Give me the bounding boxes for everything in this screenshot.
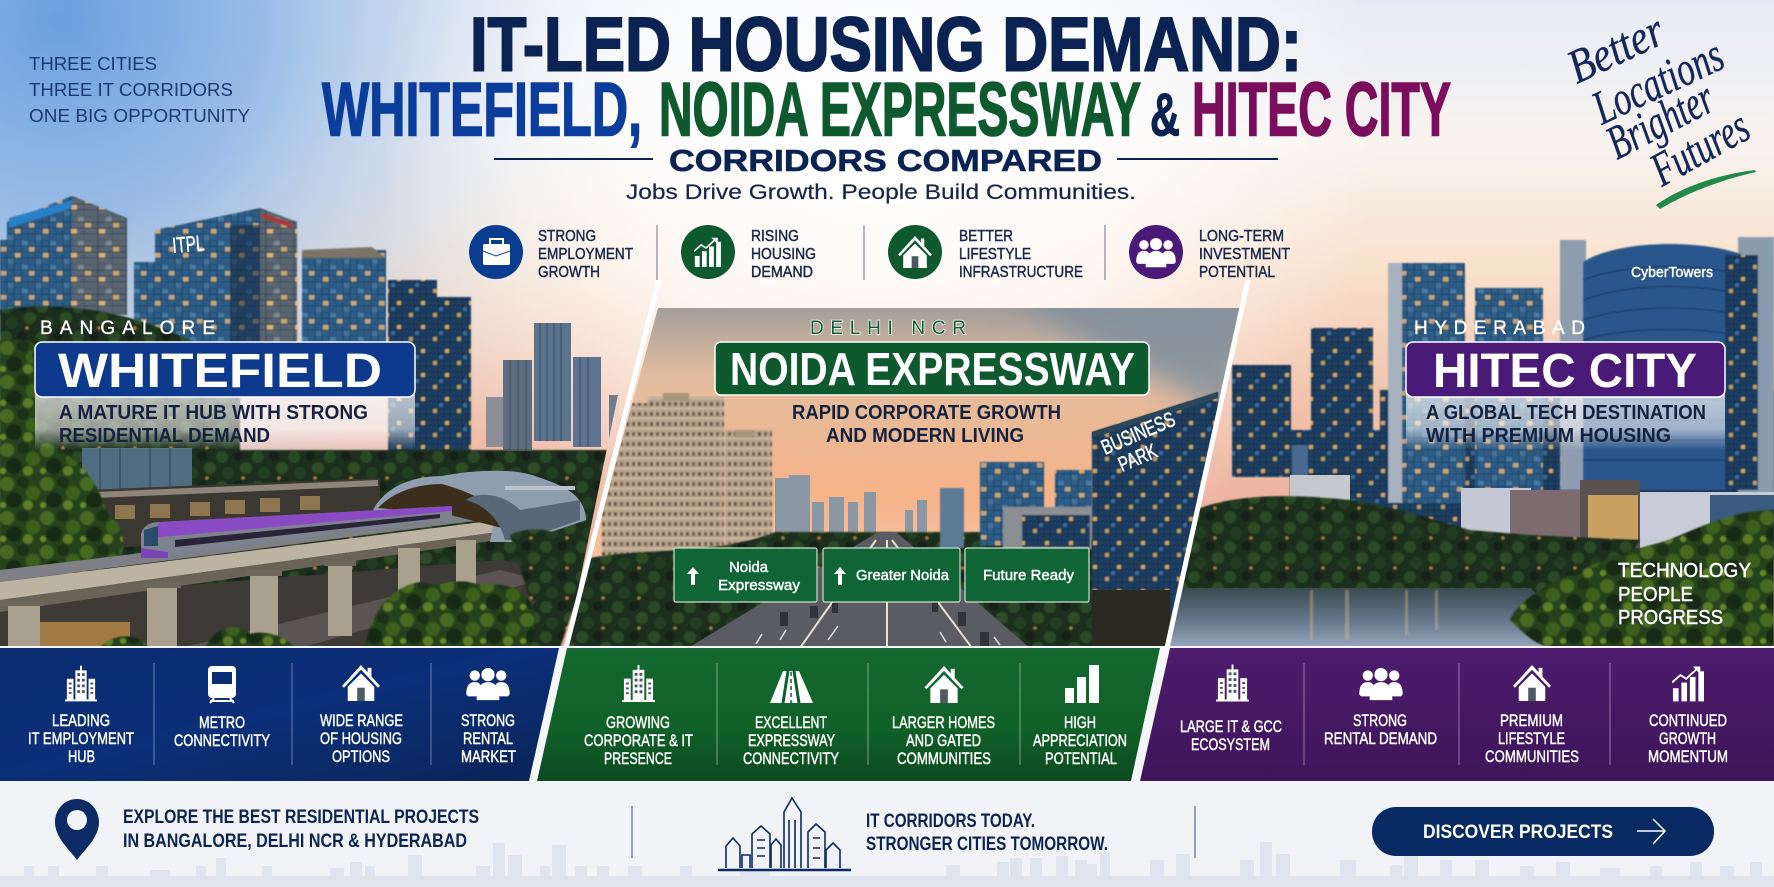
- benefit: lifestyle infrastructure: BETTER: [959, 228, 1013, 245]
- name plate: [1406, 342, 1725, 397]
- script slogan: Brighter: [1598, 71, 1723, 170]
- call to action text: IN BANGALORE, DELHI NCR & HYDERABAD: [123, 831, 467, 852]
- footer: [0, 781, 1774, 887]
- feature: expressway connectivity: CONNECTIVITY: [743, 750, 839, 768]
- distant skyline: [775, 475, 927, 535]
- panel: Whitefield features: [0, 648, 559, 781]
- subheading with rules: CORRIDORS COMPARED: [669, 143, 1102, 178]
- description: A MATURE IT HUB WITH STRONG: [59, 402, 368, 424]
- name plate: [35, 342, 415, 397]
- name plate: [715, 342, 1149, 395]
- description: RAPID CORPORATE GROWTH: [792, 402, 1061, 424]
- feature: growth momentum: [1648, 667, 1728, 766]
- benefit: investment potential: INVESTMENT: [1199, 246, 1290, 263]
- feature: IT employment hub: LEADING: [52, 712, 110, 730]
- city name: HYDERABAD: [1414, 318, 1585, 339]
- description: AND MODERN LIVING: [826, 425, 1024, 447]
- title line 1: IT-LED HOUSING DEMAND:: [470, 2, 1302, 88]
- background sky: [0, 0, 1774, 660]
- feature: IT employment hub: IT EMPLOYMENT: [28, 730, 134, 748]
- feature: rental market: STRONG: [461, 712, 515, 730]
- label: Noida Expressway: [715, 318, 1149, 447]
- city name: DELHI NCR: [810, 318, 966, 339]
- feature: lifestyle communities: [1485, 665, 1579, 766]
- office block row: [302, 247, 471, 477]
- feature: expressway connectivity: EXCELLENT: [755, 714, 827, 732]
- feature: housing options: OF HOUSING: [320, 730, 402, 748]
- benefit: employment growth: GROWTH: [538, 264, 600, 281]
- benefit: housing demand: RISING: [751, 228, 799, 245]
- left slogan: ONE BIG OPPORTUNITY: [29, 106, 250, 126]
- description: [59, 402, 368, 447]
- feature: gated communities: COMMUNITIES: [897, 750, 991, 768]
- title line 2: &: [1150, 82, 1180, 148]
- title line 2: WHITEFIELD,: [322, 68, 642, 152]
- location pin: [55, 799, 99, 860]
- feature: appreciation potential: HIGH: [1064, 714, 1096, 732]
- scene: HITEC City: [1166, 237, 1774, 648]
- feature: housing options: OPTIONS: [332, 748, 390, 766]
- trees behind the name plate: [0, 306, 240, 460]
- description: A GLOBAL TECH DESTINATION: [1426, 402, 1706, 424]
- feature: IT employment hub: [28, 666, 134, 766]
- elevated viaduct: [0, 510, 498, 648]
- road signs: [674, 548, 1089, 602]
- scene: Noida Expressway: [569, 308, 1240, 646]
- feature: lifestyle communities: COMMUNITIES: [1485, 748, 1579, 766]
- call to action text: [123, 807, 479, 852]
- translucent subtitle panel: [1406, 390, 1725, 450]
- sign: Noida Expressway: [674, 548, 817, 602]
- feature: GCC ecosystem: LARGE IT & GCC: [1180, 718, 1282, 736]
- slanted dividers: [566, 280, 1248, 648]
- mid-rise offices: [940, 462, 1092, 549]
- sign: Noida Expressway: Expressway: [718, 577, 801, 594]
- feature: lifestyle communities: PREMIUM: [1500, 712, 1563, 730]
- feature: metro connectivity: [174, 666, 270, 750]
- feature: corporate presence: [584, 665, 693, 768]
- lake: [1170, 588, 1548, 646]
- sign: Greater Noida: Greater Noida: [856, 567, 950, 584]
- feature: growth momentum: CONTINUED: [1649, 712, 1727, 730]
- description: RESIDENTIAL DEMAND: [59, 425, 270, 447]
- side slogan: technology people progress: [1618, 560, 1751, 629]
- feature: appreciation potential: POTENTIAL: [1045, 750, 1117, 768]
- description: [792, 402, 1061, 447]
- feature: metro connectivity: METRO: [199, 714, 245, 732]
- feature: appreciation potential: APPRECIATION: [1033, 732, 1127, 750]
- feature: gated communities: [892, 666, 995, 768]
- tagline: STRONGER CITIES TOMORROW.: [866, 834, 1108, 855]
- CyberTowers building: CyberTowers: [1631, 264, 1713, 281]
- title: [322, 2, 1451, 204]
- feature: rental demand: RENTAL DEMAND: [1324, 730, 1437, 748]
- script slogan: [1559, 4, 1758, 209]
- right foreground trees: [1510, 510, 1774, 648]
- benefit: housing demand: HOUSING: [751, 246, 816, 263]
- benefit: housing demand: DEMAND: [751, 264, 813, 281]
- background trees: [0, 450, 625, 648]
- benefit: housing demand: [681, 225, 816, 281]
- park trees: [1180, 496, 1640, 600]
- left slogan: [29, 54, 250, 126]
- benefit: employment growth: STRONG: [538, 228, 596, 245]
- feature: rental market: RENTAL: [463, 730, 513, 748]
- benefits row: [469, 225, 1290, 281]
- feature: corporate presence: PRESENCE: [604, 750, 672, 768]
- feature: gated communities: AND GATED: [906, 732, 981, 750]
- ITPL tower: ITPL: [171, 230, 205, 258]
- feature: expressway connectivity: [743, 671, 839, 768]
- scene: Whitefield metro and office towers: [0, 196, 625, 648]
- feature: rental demand: [1324, 668, 1437, 748]
- sign: Noida Expressway: Noida: [729, 559, 769, 576]
- feature: gated communities: LARGER HOMES: [892, 714, 995, 732]
- call to action text: EXPLORE THE BEST RESIDENTIAL PROJECTS: [123, 807, 479, 828]
- label: Whitefield: [35, 318, 415, 450]
- white band backing: [0, 646, 1774, 782]
- feature: rental market: MARKET: [461, 748, 516, 766]
- glass towers: [1232, 263, 1543, 503]
- feature: corporate presence: CORPORATE & IT: [584, 732, 693, 750]
- feature: GCC ecosystem: [1180, 665, 1282, 754]
- corridor name: NOIDA EXPRESSWAY: [730, 343, 1135, 395]
- feature: corporate presence: GROWING: [606, 714, 670, 732]
- translucent subtitle panel: [35, 390, 415, 450]
- button: discover projects: DISCOVER PROJECTS: [1423, 822, 1613, 843]
- left slogan: THREE CITIES: [29, 54, 157, 74]
- benefit: investment potential: [1129, 225, 1290, 281]
- feature: rental market: [461, 668, 516, 766]
- expressway road: [688, 532, 1030, 648]
- benefit: employment growth: [469, 225, 633, 281]
- side slogan: technology people progress: TECHNOLOGY: [1618, 560, 1751, 582]
- city name: BANGALORE: [40, 318, 215, 339]
- benefit: lifestyle infrastructure: LIFESTYLE: [959, 246, 1031, 263]
- business park glass tower: BUSINESS: [1098, 408, 1179, 460]
- left slogan: THREE IT CORRIDORS: [29, 80, 233, 100]
- feature: growth momentum: MOMENTUM: [1648, 748, 1728, 766]
- blue cloud corner: [1018, 308, 1240, 406]
- tagline: [866, 811, 1108, 855]
- CyberTowers building: [1560, 237, 1774, 497]
- benefit: lifestyle infrastructure: [888, 225, 1083, 281]
- feature: growth momentum: GROWTH: [1659, 730, 1716, 748]
- station side building: [85, 478, 380, 550]
- description: WITH PREMIUM HOUSING: [1426, 425, 1671, 447]
- office tower with sign: [0, 196, 127, 315]
- feature: appreciation potential: [1033, 665, 1127, 768]
- sign: Future Ready: [965, 548, 1089, 602]
- corridor name: HITEC CITY: [1433, 345, 1697, 398]
- benefit: investment potential: POTENTIAL: [1199, 264, 1275, 281]
- title line 2: HITEC CITY: [1192, 68, 1451, 152]
- benefit: investment potential: LONG-TERM: [1199, 228, 1284, 245]
- sign: Future Ready: Future Ready: [983, 567, 1074, 584]
- side slogan: technology people progress: PROGRESS: [1618, 607, 1723, 629]
- metro station: [372, 471, 586, 542]
- footer skyline: [0, 842, 1774, 887]
- feature: housing options: [320, 665, 403, 766]
- lower podium buildings: [1290, 475, 1774, 548]
- title line 2: [322, 68, 1451, 152]
- ITPL tower: [134, 208, 297, 352]
- feature: housing options: WIDE RANGE: [320, 712, 403, 730]
- sign: Greater Noida: [823, 548, 960, 602]
- corridor name: WHITEFIELD: [58, 345, 382, 398]
- benefit: lifestyle infrastructure: INFRASTRUCTURE: [959, 264, 1083, 281]
- foreground tree clumps: [100, 529, 588, 648]
- icon: city skyline: [718, 798, 851, 870]
- panel: Noida features: [537, 648, 1160, 781]
- feature: IT employment hub: HUB: [68, 748, 95, 766]
- panel: HITEC features: [1140, 648, 1774, 781]
- feature: expressway connectivity: EXPRESSWAY: [748, 732, 835, 750]
- button: discover projects: [1372, 807, 1714, 856]
- description: [1426, 402, 1706, 447]
- tagline: Jobs Drive Growth. People Build Communities.: [626, 181, 1136, 204]
- back glass mass: [1290, 390, 1774, 560]
- apartment towers: [602, 393, 772, 563]
- side slogan: technology people progress: PEOPLE: [1618, 584, 1693, 606]
- low glass building: [82, 448, 192, 490]
- label: HITEC City: [1406, 318, 1725, 450]
- feature: GCC ecosystem: ECOSYSTEM: [1191, 736, 1270, 754]
- business park glass tower: [1092, 392, 1218, 648]
- title line 2: NOIDA EXPRESSWAY: [659, 68, 1141, 152]
- feature: rental demand: STRONG: [1353, 712, 1407, 730]
- tagline: IT CORRIDORS TODAY.: [866, 811, 1035, 832]
- benefit: employment growth: EMPLOYMENT: [538, 246, 633, 263]
- metro train: [141, 506, 452, 558]
- roadside trees: [566, 532, 1100, 648]
- feature: lifestyle communities: LIFESTYLE: [1498, 730, 1565, 748]
- script slogan: Locations: [1584, 29, 1732, 135]
- left foreground trees: [0, 340, 123, 590]
- street below viaduct: [0, 560, 560, 648]
- evening sky: [592, 308, 1240, 558]
- distant towers: [486, 323, 621, 450]
- business park glass tower: PARK: [1115, 440, 1161, 477]
- feature: metro connectivity: CONNECTIVITY: [174, 732, 270, 750]
